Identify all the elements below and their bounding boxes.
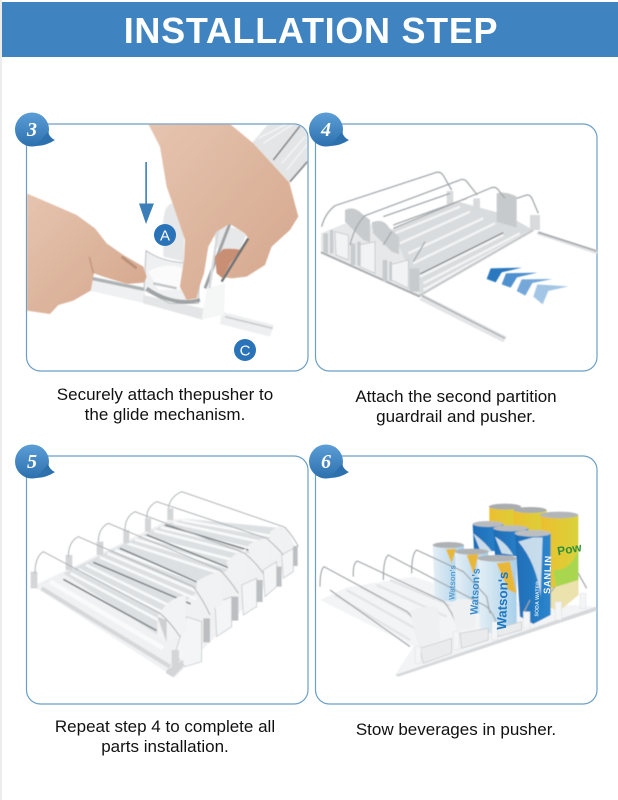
header banner bbox=[2, 2, 618, 57]
caption: step 5: Repeat step 4 to complete all bbox=[55, 717, 275, 736]
illustration: completed rack bbox=[31, 492, 298, 677]
white cans bbox=[433, 542, 517, 636]
blue cans bbox=[473, 521, 551, 624]
caption: step 6: Stow beverages in pusher. bbox=[356, 720, 556, 739]
badge: 4 bbox=[309, 112, 349, 146]
caption: step 4: guardrail and pusher. bbox=[376, 407, 536, 426]
can labels: Watson's bbox=[447, 564, 458, 600]
can labels: Pow bbox=[556, 540, 583, 558]
badge: 6 bbox=[309, 444, 349, 478]
label: C: C bbox=[240, 342, 251, 360]
caption: step 3: the glide mechanism. bbox=[85, 405, 245, 424]
label: A: A bbox=[160, 228, 170, 244]
badge: 5: 5 bbox=[27, 451, 37, 473]
label: A bbox=[154, 224, 176, 246]
yellow cans bbox=[489, 504, 578, 612]
panel: step 6 bbox=[309, 444, 597, 704]
badge: 6: 6 bbox=[321, 451, 331, 473]
illustration: rack with second guardrail bbox=[321, 172, 597, 342]
icon: blue chevrons bbox=[487, 268, 568, 304]
title: INSTALLATION STEP bbox=[124, 10, 498, 51]
badge: 4: 4 bbox=[320, 119, 331, 141]
badge: 3 bbox=[15, 112, 55, 146]
panel: step 4 bbox=[309, 112, 597, 371]
caption: step 4: Attach the second partition bbox=[355, 387, 557, 406]
label: C bbox=[234, 339, 256, 361]
can labels: SANLIN bbox=[542, 555, 553, 594]
left page edge bbox=[0, 0, 2, 800]
illustration: rack stocked with cans bbox=[320, 504, 597, 677]
icon: down arrow bbox=[139, 162, 154, 224]
can labels: SODA WATER bbox=[534, 581, 542, 617]
badge: 5 bbox=[15, 444, 55, 478]
caption: step 5: parts installation. bbox=[101, 737, 229, 756]
can labels bbox=[447, 540, 583, 630]
panel: step 5 bbox=[15, 444, 308, 704]
can labels: Watson's bbox=[494, 571, 511, 630]
badge: 3: 3 bbox=[26, 119, 37, 141]
illustration: hands attaching pusher bbox=[27, 124, 307, 337]
caption: step 3: Securely attach thepusher to bbox=[57, 385, 273, 404]
panel: step 3 bbox=[15, 112, 308, 371]
can labels: Watson's bbox=[468, 568, 483, 615]
